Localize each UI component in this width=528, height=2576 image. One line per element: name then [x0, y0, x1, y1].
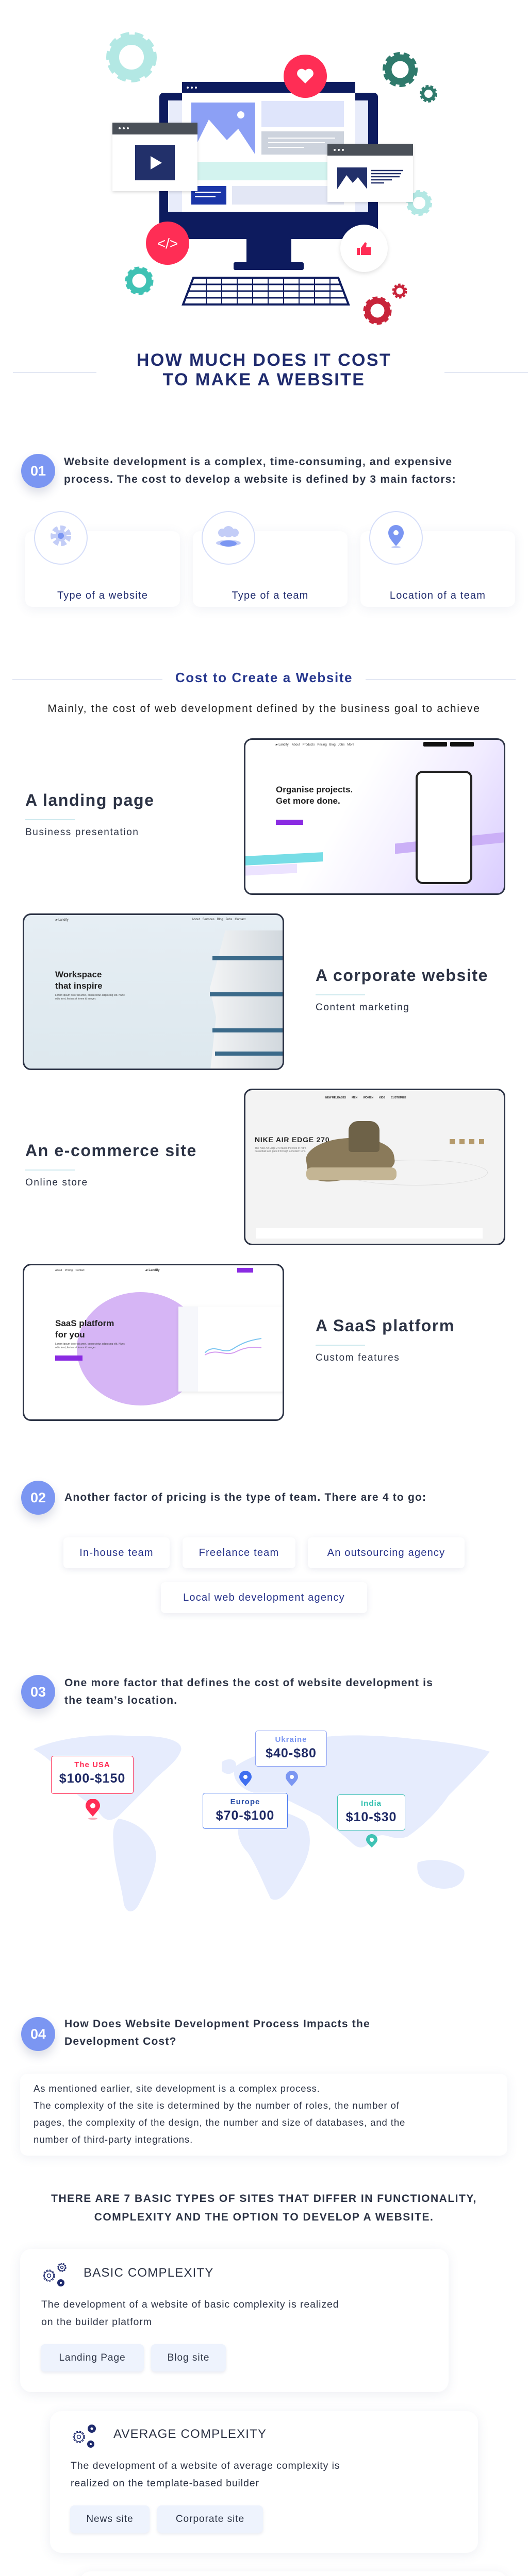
- ecommerce heading: Online store: [25, 1177, 88, 1188]
- panel: basic complexity: BASIC COMPLEXITY: [84, 2266, 214, 2280]
- screenshot: corporate: [23, 913, 284, 1070]
- panel: average complexity: AVERAGE COMPLEXITY: [113, 2427, 267, 2441]
- monitor: [159, 82, 378, 304]
- badge 02: 02: [30, 1490, 46, 1505]
- process text box: As mentioned earlier, site development is a complex process.: [34, 2083, 320, 2094]
- screenshot: saas: [23, 1264, 284, 1421]
- chip: freelance: [183, 1537, 295, 1568]
- heading: cost to create: Cost to Create a Website: [175, 670, 353, 685]
- heading: 7 basic types: COMPLEXITY AND THE OPTION TO DEVELOP A WEBSITE.: [94, 2211, 434, 2223]
- icon: code: [146, 222, 189, 265]
- label: ukraine: $40-$80: [266, 1746, 317, 1760]
- icon: gear: [34, 511, 88, 565]
- label: usa: [51, 1756, 134, 1794]
- text 03: [64, 1677, 433, 1706]
- title: HOW MUCH DOES IT COST: [137, 350, 391, 370]
- label: europe: Europe: [230, 1798, 260, 1806]
- title: TO MAKE A WEBSITE: [163, 370, 365, 389]
- intro text: Website development is a complex, time-consuming, and expensive: [64, 456, 452, 468]
- panel: average complexity: realized on the template-based builder: [71, 2478, 259, 2489]
- label: usa: $100-$150: [59, 1771, 125, 1786]
- title: [137, 350, 391, 389]
- heading: 7 basic types: THERE ARE 7 BASIC TYPES OF SITES THAT DIFFER IN FUNCTIONALITY,: [51, 2193, 477, 2205]
- screenshot: landing page: Get more done.: [276, 796, 340, 806]
- card: location: Location of a team: [390, 590, 486, 601]
- badge 03: 03: [30, 1684, 46, 1700]
- screenshot: saas: SaaS platform: [55, 1318, 114, 1328]
- screenshot: corporate: ▰ Landify: [55, 919, 69, 922]
- panel: average complexity: [50, 2411, 478, 2553]
- screenshot: corporate: odio in et, lectus sit lorem id integer.: [55, 997, 96, 1001]
- label: india: [337, 1794, 405, 1831]
- heading: 7 basic types: [51, 2193, 477, 2223]
- chip: local agency: Local web development agency: [183, 1592, 345, 1603]
- badge 02: [21, 1481, 55, 1515]
- pin: india: [366, 1834, 377, 1848]
- card: location: [360, 531, 515, 607]
- saas heading: Custom features: [316, 1352, 400, 1363]
- screenshot: saas: About Pricing Contact: [55, 1269, 85, 1272]
- pin: europe: [239, 1771, 252, 1786]
- icon: gears outline: [43, 2263, 67, 2286]
- label: ukraine: [255, 1731, 327, 1767]
- corporate heading: Content marketing: [316, 1002, 409, 1013]
- screenshot: corporate: Workspace: [55, 970, 102, 979]
- corporate heading: [316, 966, 488, 1013]
- card: type of website: [25, 531, 180, 607]
- badge 03: [21, 1675, 55, 1709]
- screenshot: ecommerce: The Nike Air Edge 270 takes the look of retro: [255, 1147, 306, 1150]
- badge 01: [21, 454, 55, 488]
- badge 04: 04: [30, 2026, 46, 2042]
- card: type of website: Type of a website: [57, 590, 148, 601]
- screenshot: corporate: Lorem ipsum dolor sit amet, consectetur adipiscing elit. Nunc: [55, 994, 125, 997]
- saas heading: [316, 1316, 455, 1363]
- panel: average complexity: The development of a website of average complexity is: [71, 2460, 340, 2471]
- screenshot: ecommerce: basketball and puts it through a modern lens.: [255, 1150, 306, 1153]
- screenshot: landing page: ▰ Landify About Products Pricing Blog Jobs More: [275, 743, 354, 747]
- screenshot: ecommerce: [244, 1089, 505, 1245]
- screenshot: saas: ▰ Landify: [145, 1269, 160, 1272]
- text 03: One more factor that defines the cost of website development is: [64, 1677, 433, 1689]
- text 04: Development Cost?: [64, 2036, 177, 2047]
- pin: usa: [86, 1799, 100, 1820]
- pin: ukraine: [286, 1771, 298, 1786]
- hero illustration: [106, 32, 437, 325]
- label: india: $10-$30: [346, 1810, 397, 1824]
- process text box: [20, 2074, 507, 2156]
- screenshot: ecommerce: NEW RELEASES MEN WOMEN KIDS CUSTOMIZE: [325, 1096, 406, 1099]
- icon: pin: [369, 511, 423, 565]
- section 03: [19, 1675, 433, 1717]
- screenshot: saas: Lorem ipsum dolor sit amet, consectetur adipiscing elit. Nunc: [55, 1343, 125, 1346]
- ecommerce heading: An e-commerce site: [25, 1141, 197, 1160]
- process text box: pages, the complexity of the design, the number and size of databases, and the: [34, 2117, 405, 2128]
- landing page heading: Business presentation: [25, 827, 139, 838]
- label: europe: $70-$100: [216, 1808, 274, 1823]
- text 04: [64, 2018, 370, 2047]
- label: india: India: [361, 1799, 382, 1808]
- video window: [112, 123, 197, 191]
- icon: like: [340, 225, 388, 272]
- process text box: The complexity of the site is determined by the number of roles, the number of: [34, 2100, 400, 2111]
- panel: average complexity: Corporate site: [176, 2514, 244, 2524]
- chip: in-house: In-house team: [79, 1547, 154, 1558]
- image window: [327, 144, 413, 202]
- saas heading: A SaaS platform: [316, 1316, 455, 1335]
- panel: average complexity: News site: [86, 2514, 134, 2524]
- panel: difficult complexity: [79, 2571, 507, 2576]
- landing page heading: [25, 791, 155, 838]
- panel: basic complexity: Blog site: [168, 2352, 209, 2363]
- chip: outsourcing: An outsourcing agency: [327, 1547, 445, 1558]
- icon: gears: [112, 38, 435, 321]
- panel: basic complexity: [20, 2249, 449, 2392]
- chip: outsourcing: [308, 1537, 465, 1568]
- screenshot: corporate: that inspire: [55, 981, 103, 991]
- label: ukraine: Ukraine: [275, 1735, 307, 1744]
- chip: in-house: [63, 1537, 170, 1568]
- badge 04: [21, 2017, 55, 2051]
- ecommerce heading: [25, 1141, 197, 1188]
- badge 01: 01: [30, 463, 46, 479]
- world map: [34, 1731, 490, 1911]
- intro text: [64, 456, 456, 485]
- label: europe: [203, 1793, 288, 1829]
- section 02: [19, 1481, 466, 1616]
- screenshot: saas: odio in et, lectus sit lorem id integer.: [55, 1346, 96, 1349]
- text 04: How Does Website Development Process Impacts the: [64, 2018, 370, 2030]
- icon: team: [202, 511, 255, 565]
- panel: basic complexity: The development of a website of basic complexity is realized: [41, 2299, 339, 2310]
- label: usa: The USA: [74, 1760, 110, 1769]
- screenshot: corporate: About Services Blog Jobs Contact: [192, 918, 245, 921]
- section 01: [19, 454, 508, 609]
- subtitle: Mainly, the cost of web development defined by the business goal to achieve: [47, 703, 481, 715]
- screenshot: landing page: [244, 738, 505, 895]
- text 03: the team’s location.: [64, 1694, 177, 1706]
- icon: heart: [284, 55, 327, 98]
- card: type of team: Type of a team: [232, 590, 309, 601]
- chip: freelance: Freelance team: [199, 1547, 279, 1558]
- panel: basic complexity: Landing Page: [59, 2352, 126, 2363]
- screenshot: saas: for you: [55, 1330, 85, 1340]
- panel: basic complexity: on the builder platform: [41, 2316, 152, 2328]
- process text box: number of third-party integrations.: [34, 2134, 193, 2145]
- screenshot: ecommerce: NIKE AIR EDGE 270: [255, 1136, 329, 1144]
- chip: local agency: [161, 1582, 367, 1613]
- card: type of team: [193, 531, 348, 607]
- text 02: Another factor of pricing is the type of team. There are 4 to go:: [64, 1492, 426, 1503]
- corporate heading: A corporate website: [316, 966, 488, 985]
- intro text: process. The cost to develop a website is defined by 3 main factors:: [64, 473, 456, 485]
- icon: code: </>: [157, 235, 178, 251]
- screenshot: landing page: Organise projects.: [276, 785, 353, 794]
- section 04: [19, 2017, 370, 2059]
- icon: gears half: [73, 2425, 96, 2448]
- landing page heading: A landing page: [25, 791, 155, 809]
